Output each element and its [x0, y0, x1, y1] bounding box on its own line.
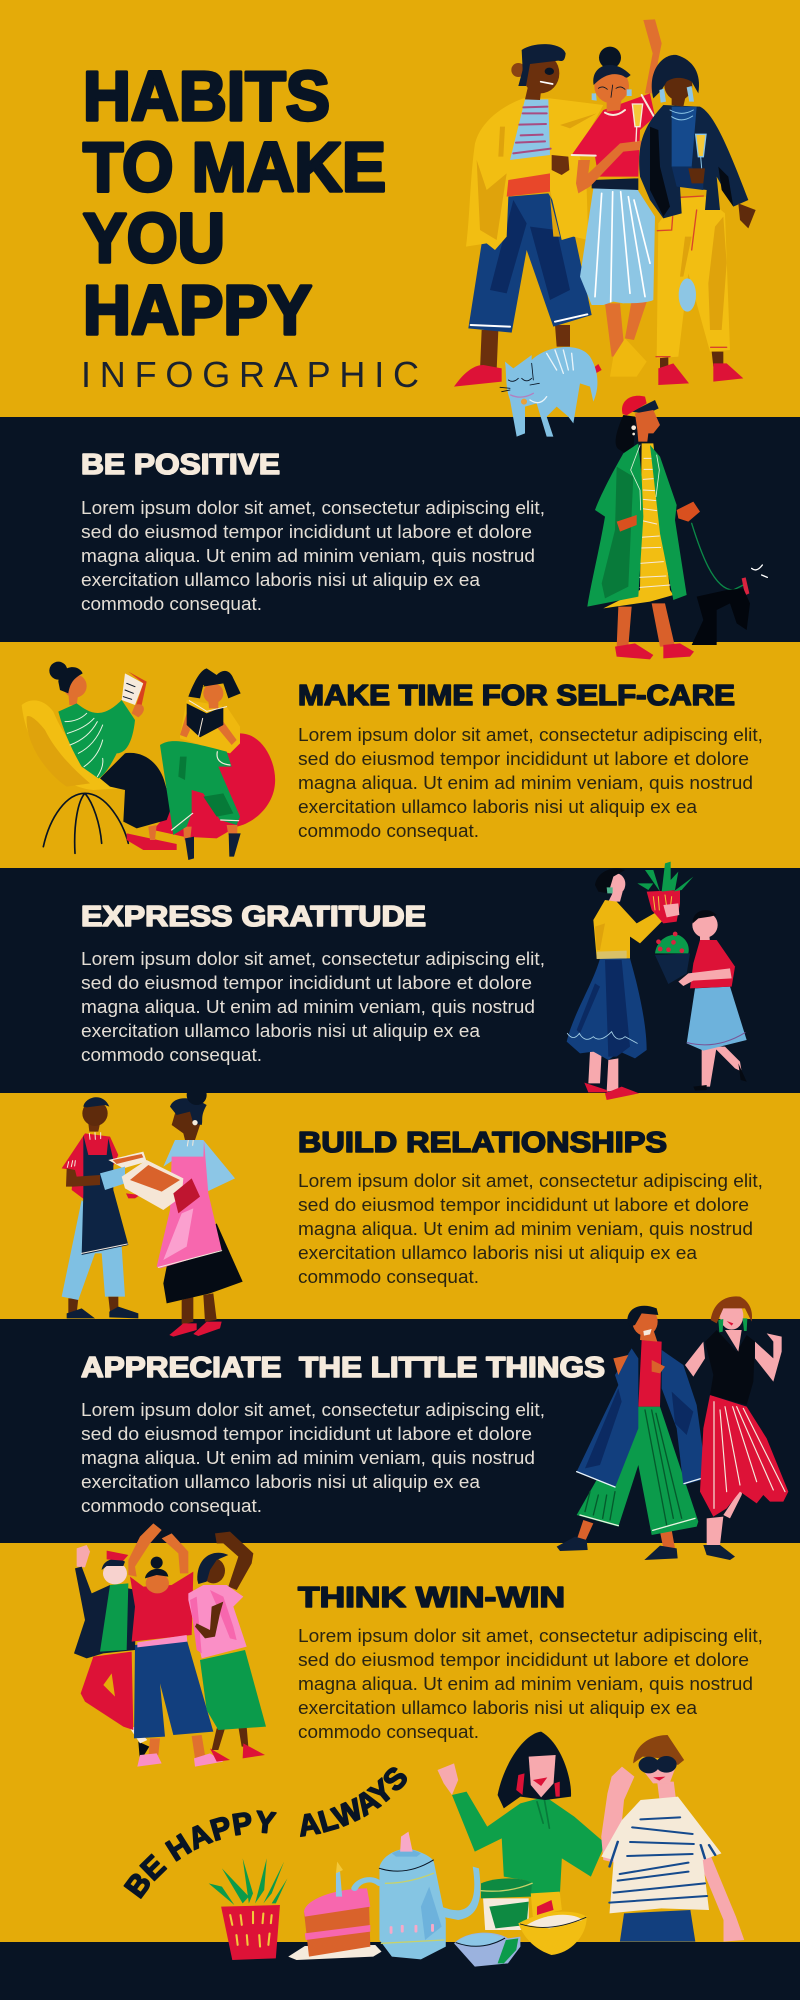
section: appreciate the little things: sed do eiusmod tempor incididunt ut labore et dolore — [81, 1424, 532, 1444]
illustration: fashionable couple — [557, 1296, 788, 1560]
child with plant — [655, 910, 747, 1091]
section: think win-win: magna aliqua. Ut enim ad minim veniam, quis nostrud — [298, 1674, 753, 1694]
section: be positive — [81, 449, 545, 614]
illustration: two bakers with tray — [62, 1085, 243, 1337]
teapot — [355, 1832, 480, 1959]
section: think win-win: THINK WIN-WIN — [298, 1582, 565, 1614]
section: appreciate the little things — [81, 1352, 605, 1516]
title — [83, 57, 386, 349]
section: think win-win: commodo consequat. — [298, 1722, 479, 1742]
cake — [288, 1862, 382, 1960]
woman in red trousers — [685, 1296, 788, 1560]
section: make time for self-care: magna aliqua. Ut enim ad minim veniam, quis nostrud — [298, 773, 753, 793]
section: express gratitude: commodo consequat. — [81, 1045, 262, 1065]
section: express gratitude: Lorem ipsum dolor sit amet, consectetur adipiscing elit, — [81, 949, 545, 969]
baker woman — [157, 1085, 243, 1337]
woman in green sweater — [437, 1732, 605, 1897]
curved slogan: BE HAPPY ALWAYS — [124, 1767, 407, 1899]
section: build relationships — [298, 1127, 763, 1287]
section: make time for self-care: MAKE TIME FOR SELF-CARE — [298, 680, 735, 712]
section: make time for self-care: sed do eiusmod tempor incididunt ut labore et dolore — [298, 749, 749, 769]
section: think win-win — [298, 1582, 763, 1742]
section: think win-win: exercitation ullamco laboris nisi ut aliquip ex ea — [298, 1698, 698, 1718]
section: be positive: commodo consequat. — [81, 594, 262, 614]
centre dancer — [128, 1523, 223, 1767]
man — [454, 44, 603, 387]
section: express gratitude: sed do eiusmod tempor incididunt ut labore et dolore — [81, 973, 532, 993]
section: be positive: Lorem ipsum dolor sit amet, consectetur adipiscing elit, — [81, 498, 545, 518]
baker man — [62, 1097, 138, 1318]
section: make time for self-care: commodo consequat. — [298, 821, 479, 841]
baking tray — [100, 1152, 200, 1213]
section: be positive: exercitation ullamco laboris nisi ut aliquip ex ea — [81, 570, 481, 590]
section: make time for self-care: exercitation ullamco laboris nisi ut aliquip ex ea — [298, 797, 698, 817]
title: YOU — [83, 199, 225, 277]
section: express gratitude: EXPRESS GRATITUDE — [81, 901, 426, 933]
dog and leash — [692, 523, 767, 645]
title: HAPPY — [83, 271, 312, 349]
section: think win-win: sed do eiusmod tempor incididunt ut labore et dolore — [298, 1650, 749, 1670]
illustration: table scene with two women — [209, 1732, 744, 1967]
section: make time for self-care: Lorem ipsum dolor sit amet, consectetur adipiscing elit, — [298, 725, 763, 745]
illustration: two women reading — [22, 662, 275, 860]
section: build relationships: commodo consequat. — [298, 1267, 479, 1287]
section: be positive: sed do eiusmod tempor incididunt ut labore et dolore — [81, 522, 532, 542]
subtitle: INFOGRAPHIC — [81, 354, 419, 395]
left dancer — [74, 1545, 149, 1762]
man in blue coat — [557, 1306, 707, 1560]
jar and bowl — [481, 1878, 587, 1955]
section: think win-win: Lorem ipsum dolor sit amet, consectetur adipiscing elit, — [298, 1626, 763, 1646]
section: build relationships: sed do eiusmod tempor incididunt ut labore et dolore — [298, 1195, 749, 1215]
section: build relationships: BUILD RELATIONSHIPS — [298, 1127, 667, 1159]
section: appreciate the little things: exercitation ullamco laboris nisi ut aliquip ex ea — [81, 1472, 481, 1492]
section: appreciate the little things: magna aliqua. Ut enim ad minim veniam, quis nostrud — [81, 1448, 535, 1468]
illustration: three dancers — [74, 1523, 266, 1767]
illustration: woman walking dog — [587, 396, 767, 659]
section: build relationships: magna aliqua. Ut enim ad minim veniam, quis nostrud — [298, 1219, 753, 1239]
section: appreciate the little things: APPRECIATE THE LITTLE THINGS — [81, 1352, 605, 1384]
section: express gratitude: exercitation ullamco laboris nisi ut aliquip ex ea — [81, 1021, 481, 1041]
illustration: three friends and cat — [454, 19, 756, 437]
title: HABITS — [83, 57, 330, 135]
section: be positive: magna aliqua. Ut enim ad minim veniam, quis nostrud — [81, 546, 535, 566]
section: appreciate the little things: commodo consequat. — [81, 1496, 262, 1516]
woman in striped top — [601, 1735, 744, 1942]
section: express gratitude — [81, 901, 545, 1065]
section: be positive: BE POSITIVE — [81, 449, 280, 481]
illustration: woman and child with potted plants — [567, 862, 747, 1100]
section: appreciate the little things: Lorem ipsum dolor sit amet, consectetur adipiscing elit, — [81, 1400, 545, 1420]
woman with plant — [567, 862, 693, 1100]
section: make time for self-care — [298, 680, 763, 841]
right dancer — [188, 1532, 266, 1762]
section: build relationships: exercitation ullamco laboris nisi ut aliquip ex ea — [298, 1243, 698, 1263]
woman in red top — [572, 19, 662, 377]
title: TO MAKE — [83, 128, 386, 206]
woman on red bean bag — [160, 668, 241, 860]
section: build relationships: Lorem ipsum dolor sit amet, consectetur adipiscing elit, — [298, 1171, 763, 1191]
tea cup — [454, 1933, 520, 1967]
woman in navy jacket — [639, 55, 756, 385]
cat — [500, 347, 597, 437]
potted plant — [209, 1858, 287, 1960]
section: express gratitude: magna aliqua. Ut enim ad minim veniam, quis nostrud — [81, 997, 535, 1017]
woman in green sweater — [49, 662, 177, 850]
